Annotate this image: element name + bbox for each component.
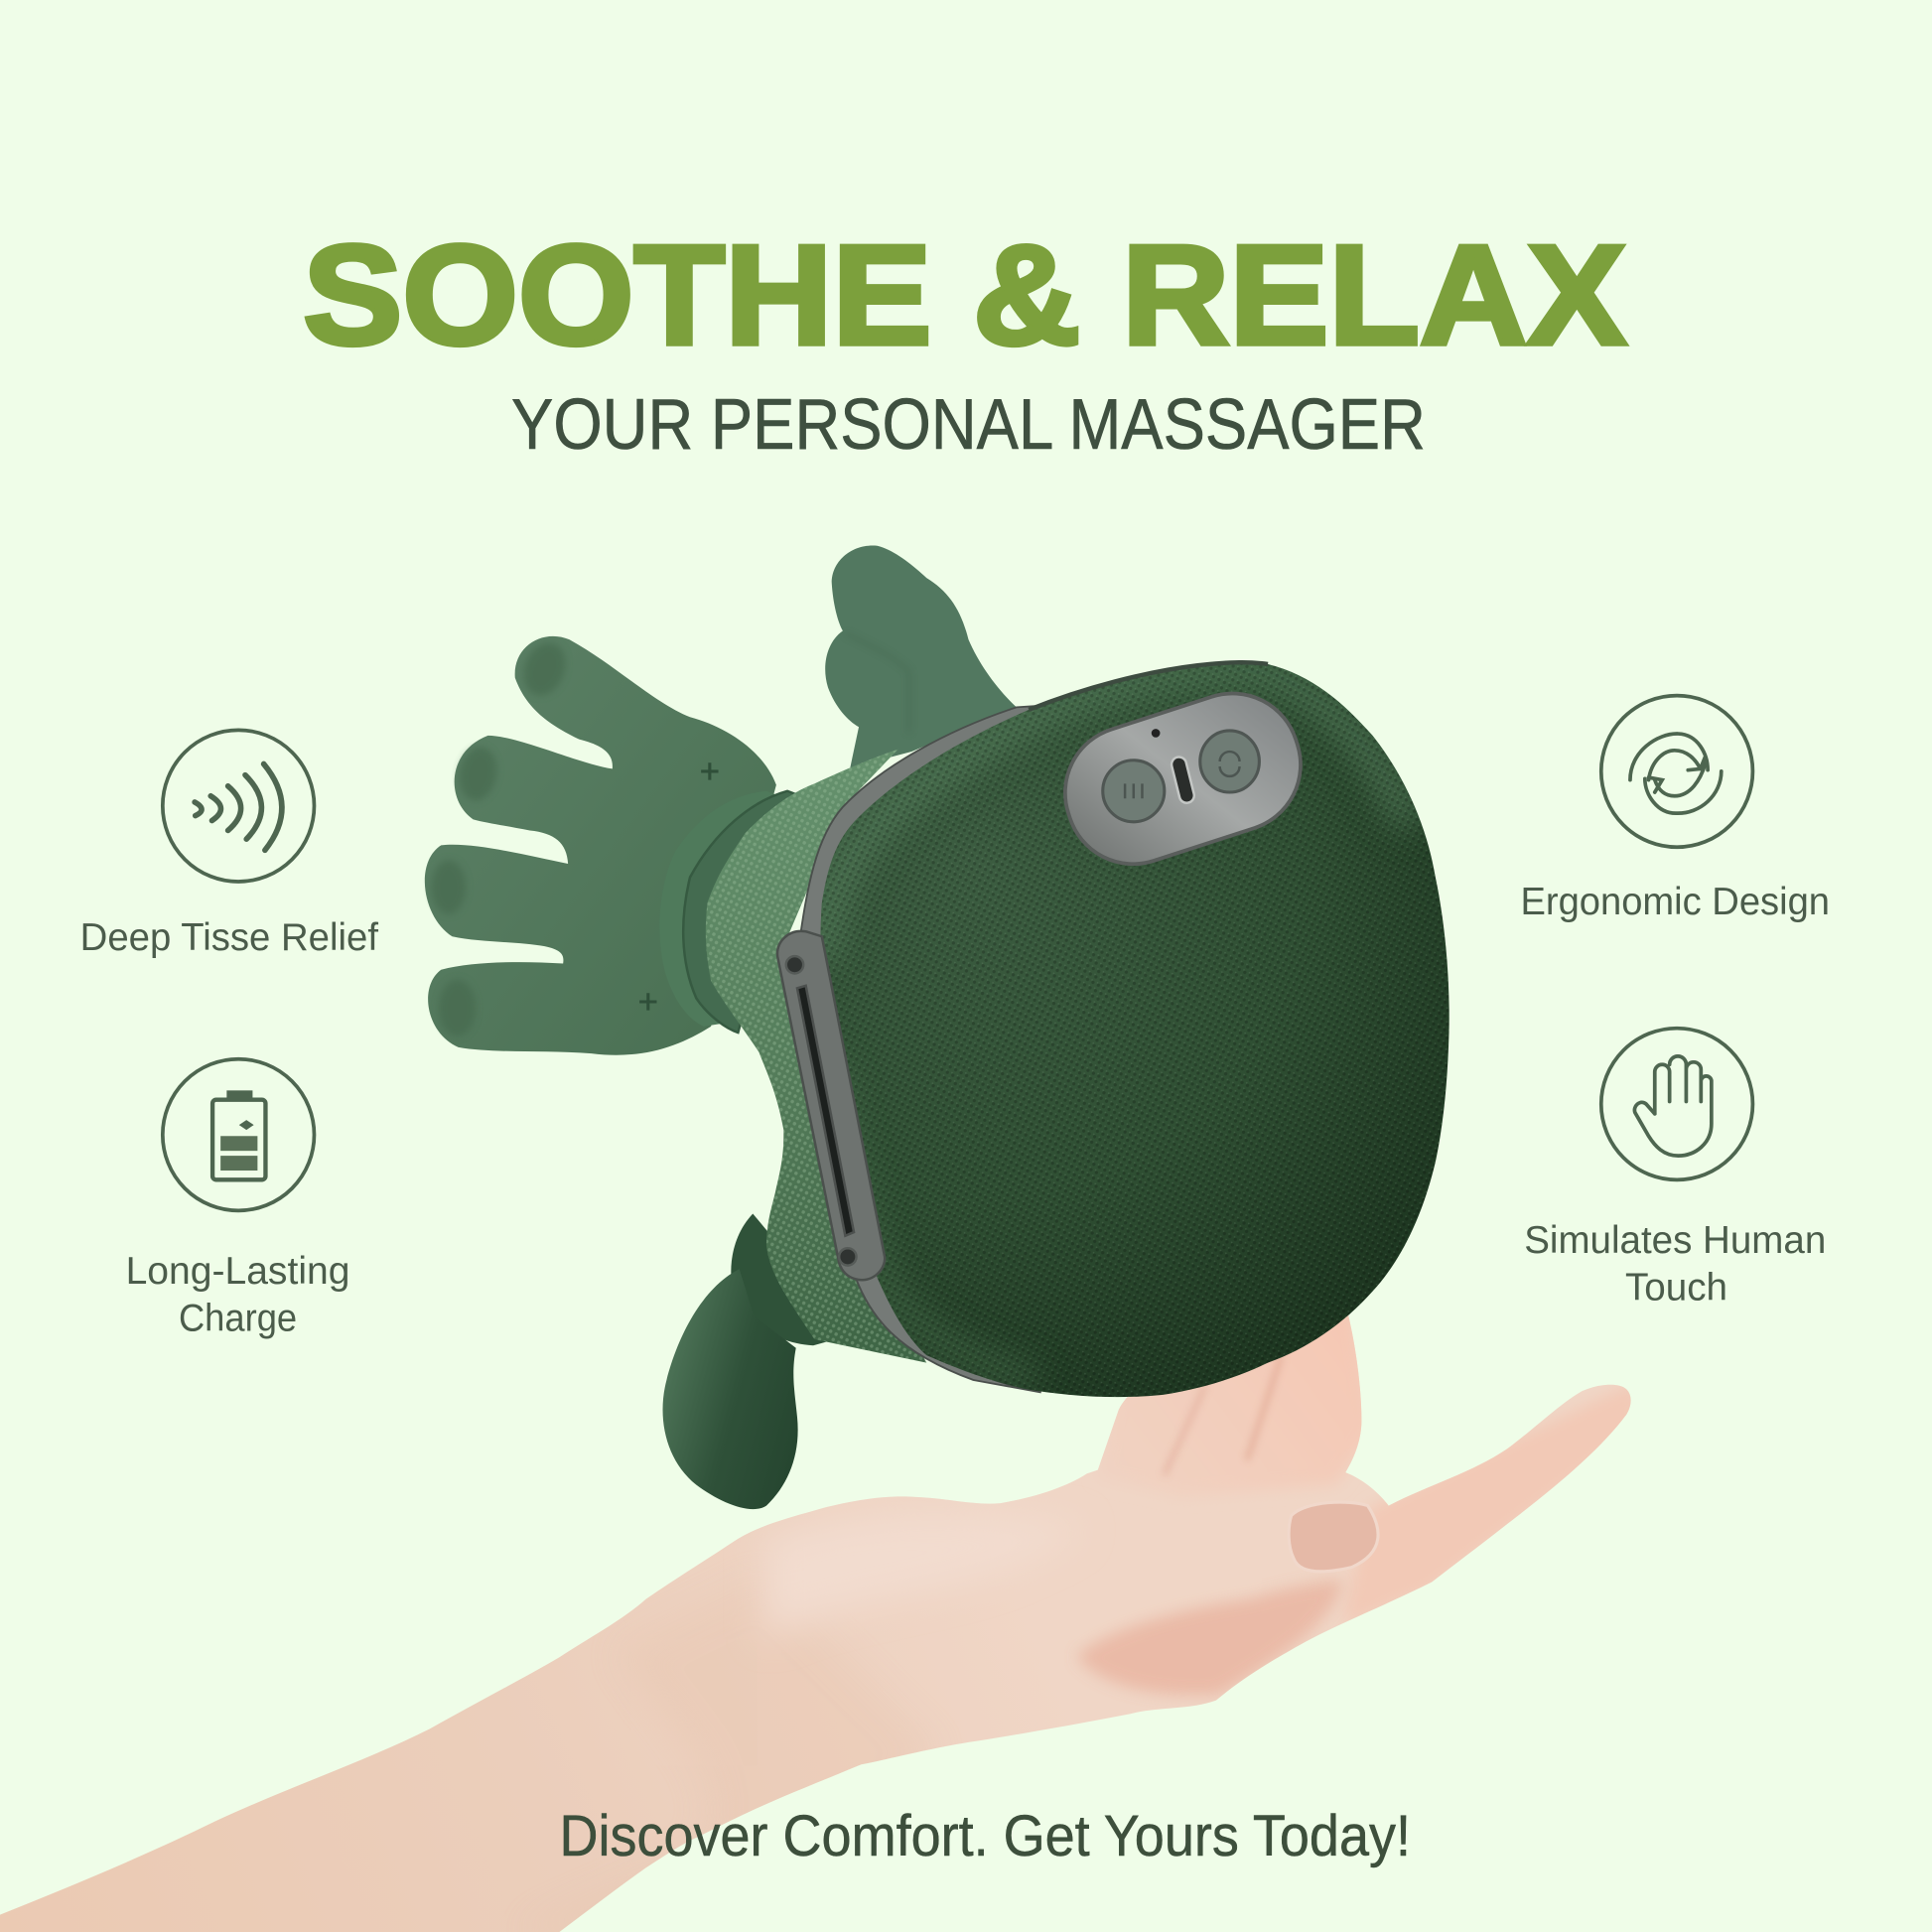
dark top seam [1029, 662, 1268, 710]
subtitle: YOUR PERSONAL MASSAGER [511, 385, 1426, 465]
mode button [1103, 760, 1165, 822]
bottom foot massager [663, 1269, 798, 1509]
feature: simulates human touch [1524, 1029, 1826, 1309]
call to action: Discover Comfort. Get Yours Today! [559, 1804, 1411, 1868]
power button [1200, 731, 1259, 792]
main fabric body [821, 662, 1449, 1397]
massager device [425, 546, 1449, 1509]
feature: deep tissue relief [80, 730, 378, 959]
feature: simulates human touch: Touch [1625, 1266, 1727, 1309]
control button panel [1047, 676, 1317, 882]
feature: long-lasting charge: Charge [179, 1297, 297, 1339]
bellows rings [659, 791, 776, 1027]
label: Simulates Human [1524, 1219, 1826, 1262]
upper massage hand [825, 546, 1017, 767]
side slot plate [777, 931, 885, 1280]
foot collar [731, 1213, 844, 1345]
feature: long-lasting charge [126, 1059, 349, 1339]
hand cross markings [639, 762, 719, 1011]
human hand photo illustration [0, 1282, 1639, 1932]
title: SOOTHE & RELAX [303, 216, 1626, 374]
icon: rotation arrows [1601, 696, 1752, 847]
thumb nail [1289, 1502, 1378, 1572]
metal rim [798, 705, 1053, 1392]
fabric neck [706, 750, 926, 1363]
label: Ergonomic Design [1520, 881, 1830, 923]
usb port [1170, 756, 1195, 804]
feature: ergonomic design [1520, 696, 1830, 923]
label: Long-Lasting [126, 1250, 349, 1293]
upper hand crease [845, 633, 909, 733]
label: Deep Tisse Relief [80, 916, 378, 959]
massage hand with fingers [425, 636, 776, 1055]
icon: battery [163, 1059, 314, 1210]
inner bellows ring [683, 791, 813, 1033]
finger nails [431, 636, 573, 1036]
icon: sound waves [163, 730, 314, 882]
indicator light [1152, 729, 1160, 738]
icon: open hand [1601, 1029, 1752, 1179]
